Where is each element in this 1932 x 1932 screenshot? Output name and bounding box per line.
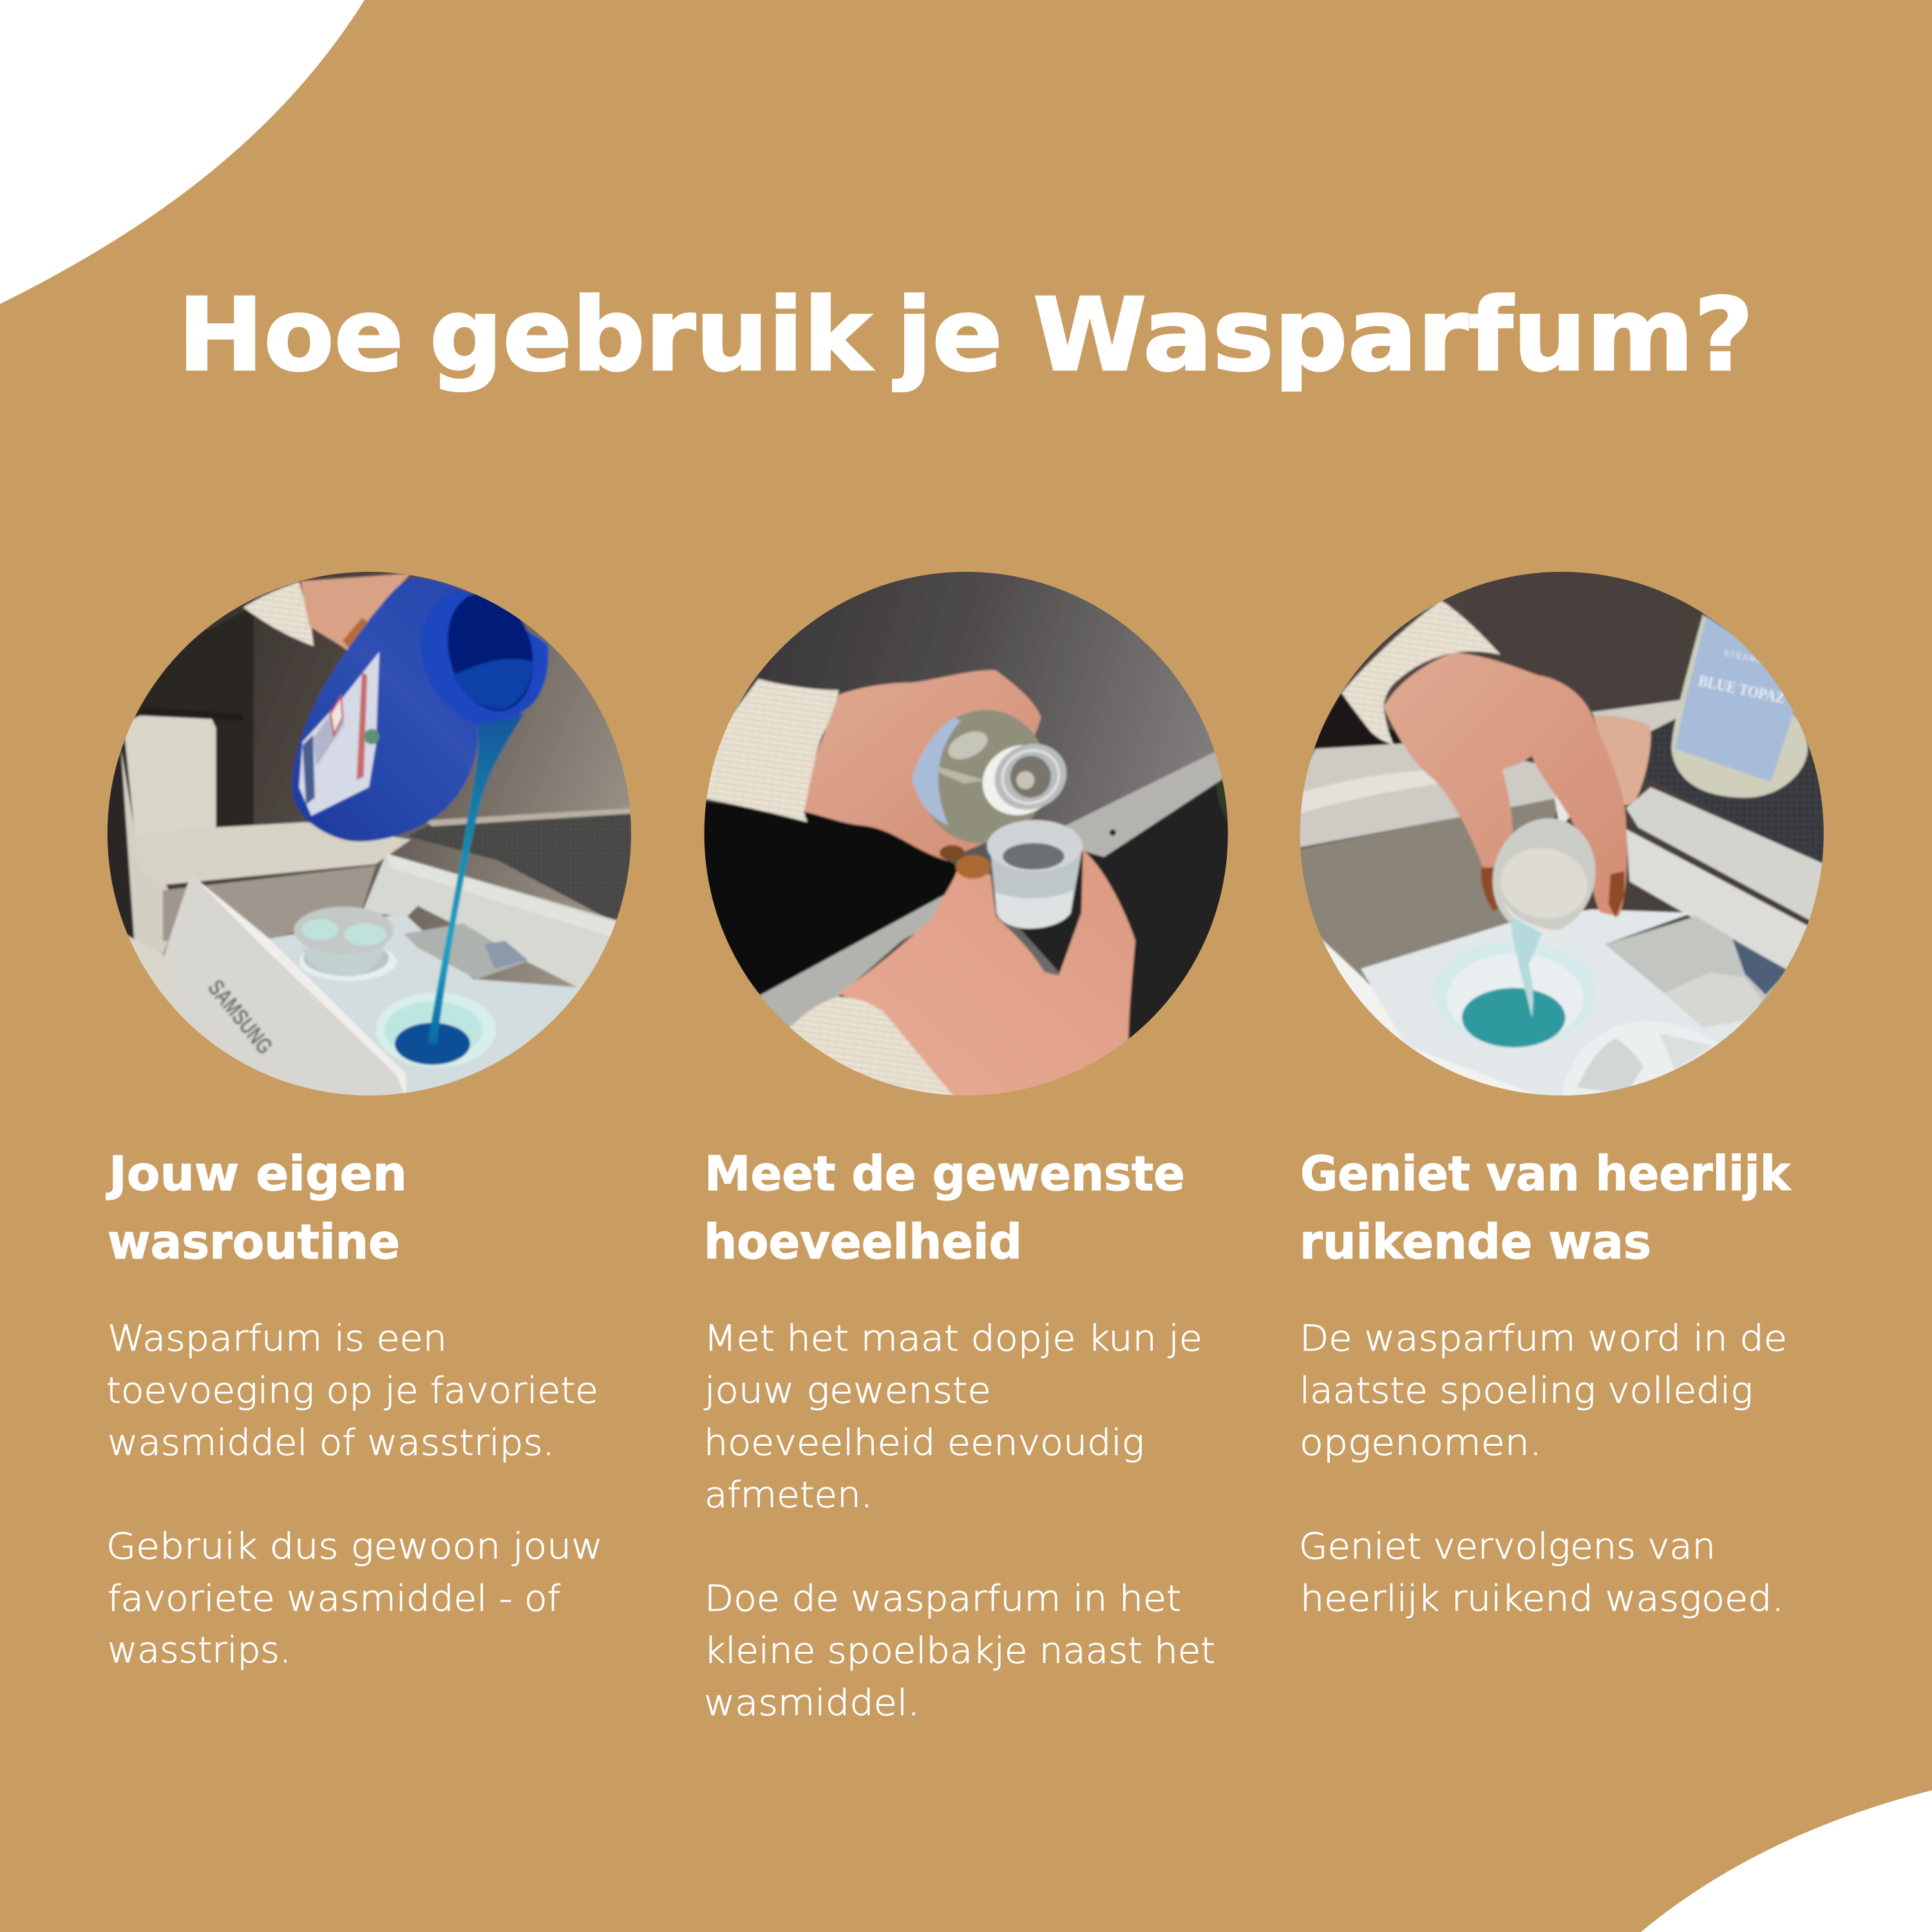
panel: step 1 <box>104 567 641 1671</box>
heading <box>106 1146 407 1270</box>
body text: Gebruik dus gewoon jouw <box>106 1526 603 1567</box>
body text: favoriete wasmiddel - of <box>108 1578 561 1619</box>
body text: wasstrips. <box>108 1629 291 1671</box>
body text: De wasparfum word in de <box>1300 1318 1787 1359</box>
body text: afmeten. <box>705 1474 873 1515</box>
heading: hoeveelheid <box>704 1215 1022 1270</box>
body text <box>704 1318 1215 1723</box>
body text: laatste spoeling volledig <box>1300 1370 1753 1411</box>
body text: Wasparfum is een <box>108 1318 447 1359</box>
title: Wasparfum? <box>1033 276 1754 393</box>
body text: Doe de wasparfum in het <box>705 1578 1181 1619</box>
heading: ruikende was <box>1300 1215 1651 1270</box>
panel: step 2 <box>699 567 1240 1723</box>
body text <box>106 1318 603 1671</box>
body text: heerlijk ruikend wasgoed. <box>1300 1578 1784 1619</box>
title: gebruik <box>430 276 873 393</box>
heading: wasroutine <box>108 1215 400 1270</box>
body text: wasmiddel. <box>704 1682 920 1723</box>
heading: Geniet van heerlijk <box>1300 1146 1792 1202</box>
body text: wasmiddel of wasstrips. <box>108 1422 554 1463</box>
heading: Jouw eigen <box>106 1146 407 1202</box>
corner shape: bottom right <box>1641 1790 1932 1932</box>
photo: measuring perfume into cap <box>699 567 1240 1105</box>
corner shape: top left <box>0 0 365 304</box>
heading <box>704 1146 1185 1270</box>
title <box>178 276 1754 393</box>
body text: jouw gewenste <box>704 1370 991 1411</box>
heading <box>1300 1146 1792 1270</box>
body text: Met het maat dopje kun je <box>704 1318 1202 1359</box>
bottle label text: STEAMSTONE <box>1723 648 1791 671</box>
body text <box>1299 1318 1787 1619</box>
body text: Geniet vervolgens van <box>1299 1526 1716 1567</box>
brand text on cover: SAMSUNG <box>203 975 278 1059</box>
body text: toevoeging op je favoriete <box>106 1370 598 1411</box>
body text: hoeveelheid eenvoudig <box>704 1422 1144 1463</box>
photo: pouring perfume into softener compartment <box>1294 567 1832 1108</box>
title: je <box>893 276 1003 393</box>
title: Hoe <box>178 276 404 393</box>
bottle label name: BLUE TOPAZ <box>1697 672 1786 707</box>
body text: opgenomen. <box>1300 1422 1542 1463</box>
panel: step 3 <box>1294 567 1832 1619</box>
body text: kleine spoelbakje naast het <box>704 1630 1215 1671</box>
photo: pouring detergent into washing machine <box>104 567 641 1105</box>
heading: Meet de gewenste <box>705 1146 1185 1202</box>
